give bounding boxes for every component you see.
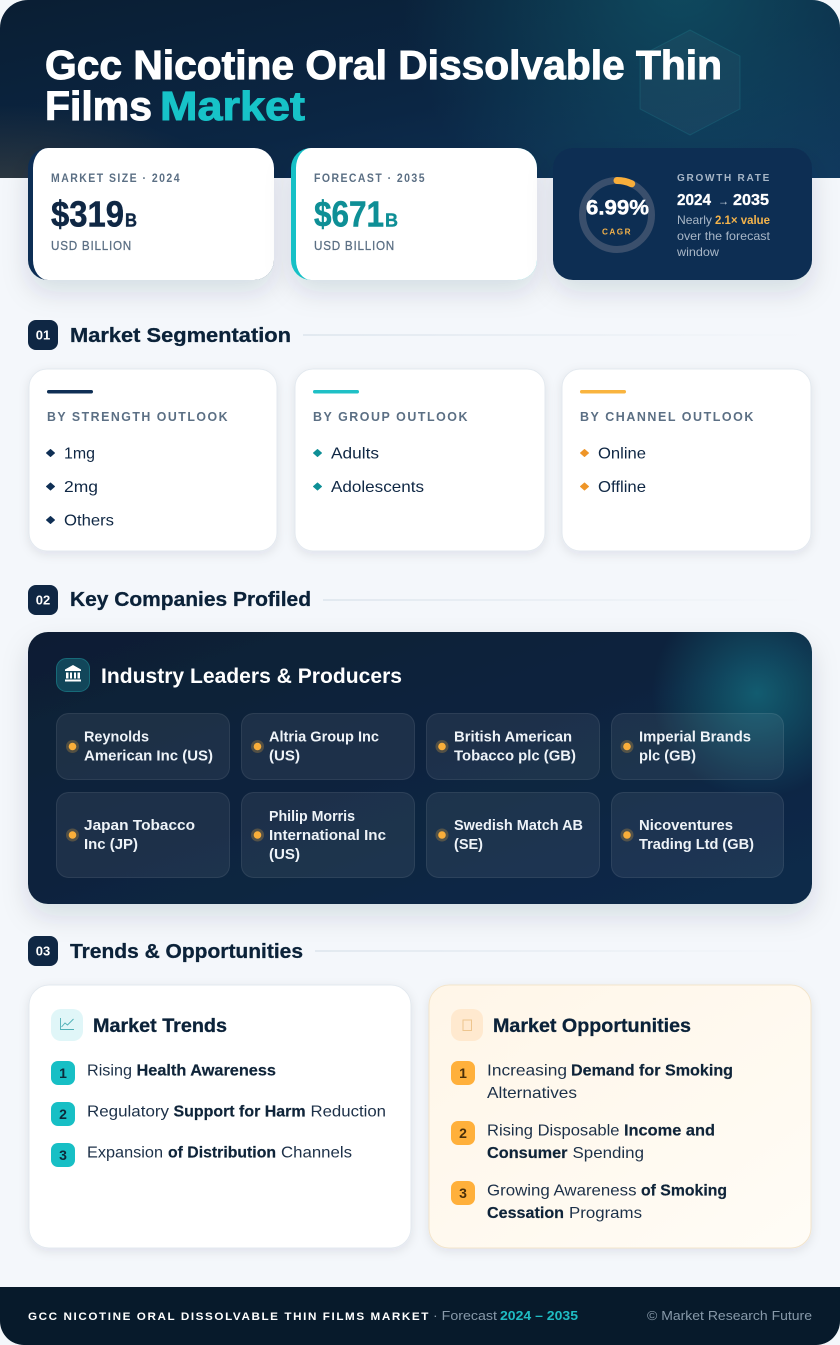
stat label: FORECAST · 2035 (314, 173, 426, 185)
segment list: Others (64, 512, 114, 530)
opportunity 3 (451, 1181, 727, 1222)
section heading 03: Trends & Opportunities (70, 940, 303, 963)
growth rate text: 2035 (733, 192, 769, 209)
stat unit: USD BILLION (51, 239, 132, 253)
company: Japan Tobacco: Inc (JP) (84, 836, 138, 853)
footer credit: © Market Research Future (647, 1309, 812, 1323)
section heading 01: 01 (36, 328, 50, 342)
trend 1: 1 (59, 1065, 67, 1081)
company: British American Tobacco: Tobacco plc (GB) (454, 748, 576, 764)
company: Swedish Match (426, 792, 600, 878)
chart: CAGR ring (582, 180, 652, 250)
title: Films (45, 83, 152, 129)
company: Swedish Match: (SE) (454, 836, 483, 853)
company: Imperial Brands: Imperial Brands (639, 728, 751, 746)
trend 3: Channels (281, 1144, 352, 1162)
panel heading: Market Opportunities (493, 1015, 691, 1037)
opportunity 2: Spending (572, 1145, 644, 1162)
opportunity 1: Increasing (487, 1062, 567, 1080)
section heading 01: Market Segmentation (70, 324, 291, 347)
company: Philip Morris (242, 792, 414, 878)
panel: market opportunities (429, 985, 811, 1248)
trend 1 (51, 1061, 276, 1085)
company: British American Tobacco: British American (454, 728, 572, 746)
opportunity 3: Growing Awareness (487, 1182, 636, 1200)
company: Imperial Brands: plc (GB) (639, 748, 696, 764)
segment list: Adults (331, 446, 379, 462)
panel: industry leaders (28, 632, 812, 904)
company: Philip Morris: Philip Morris (269, 808, 355, 825)
company: Nicoventures: Nicoventures (639, 817, 733, 834)
company: Philip Morris: (US) (269, 846, 300, 863)
footer title: 2024 – 2035 (500, 1309, 578, 1323)
segment list (46, 446, 114, 530)
company: Japan Tobacco: Japan Tobacco (84, 817, 195, 834)
opportunity 3: of Smoking (641, 1182, 727, 1200)
opportunity 1: Demand for Smoking (571, 1062, 733, 1080)
footer title (28, 1309, 578, 1323)
icon: institution (56, 658, 90, 692)
panel: by group outlook (295, 369, 545, 551)
segment heading: BY STRENGTH OUTLOOK (47, 409, 229, 424)
growth rate text: → (718, 194, 729, 208)
stat value: $319 (51, 194, 124, 234)
panel: market trends (29, 985, 411, 1248)
segment list: Online (598, 446, 646, 462)
stat value: B (385, 210, 398, 230)
stat value: B (125, 210, 137, 230)
segment list: Offline (598, 479, 646, 496)
icon: decorative hexagon (640, 30, 740, 135)
company: Altria Group: Altria Group Inc (269, 728, 379, 746)
chart: CAGR ring: 6.99% (586, 196, 649, 220)
opportunity 2: 2 (459, 1125, 467, 1141)
trend 1: Rising (87, 1062, 132, 1080)
trend 2: 2 (59, 1106, 67, 1122)
segment heading: BY CHANNEL OUTLOOK (580, 409, 755, 424)
trend 3: 3 (59, 1147, 67, 1163)
growth rate text (676, 172, 771, 259)
trend 2: Regulatory (87, 1104, 169, 1120)
section heading 01 (28, 320, 812, 350)
growth rate text: 2024 (677, 192, 711, 209)
trend 3: Expansion (87, 1144, 163, 1162)
opportunity 2: Income and (624, 1122, 715, 1140)
opportunity 3: Cessation (487, 1205, 564, 1222)
segment list: 1mg (64, 446, 95, 462)
segment list (580, 446, 646, 496)
company: British American Tobacco (426, 714, 600, 780)
company: Imperial Brands (612, 714, 784, 780)
opportunity 2 (451, 1121, 715, 1162)
company: Reynolds American: Reynolds (84, 728, 149, 746)
opportunity 2: Consumer (487, 1145, 568, 1162)
opportunity 3: Programs (569, 1205, 642, 1222)
trend 3 (51, 1143, 352, 1167)
panel heading: Industry Leaders & Producers (101, 664, 402, 688)
company: Altria Group: (US) (269, 748, 300, 764)
opportunity 1: Alternatives (487, 1085, 577, 1102)
segment heading: BY GROUP OUTLOOK (313, 409, 469, 424)
stat card: forecast 2035 (291, 148, 537, 280)
company: Nicoventures (612, 792, 784, 878)
company: Altria Group (242, 714, 414, 780)
icon: line chart (51, 1009, 83, 1041)
growth rate text: Nearly (677, 213, 712, 227)
company: Philip Morris: International Inc (269, 827, 386, 844)
company: Swedish Match: Swedish Match AB (454, 817, 583, 834)
opportunity 1: 1 (459, 1065, 467, 1081)
opportunity 3: 3 (459, 1185, 467, 1201)
company: Reynolds American (56, 714, 230, 780)
trend 2: Support for Harm (174, 1104, 306, 1120)
segment list: 2mg (64, 479, 98, 496)
growth rate text: window (676, 245, 719, 259)
panel: by strength outlook (29, 369, 277, 551)
growth rate text: GROWTH RATE (677, 172, 771, 184)
panel: by channel outlook (562, 369, 811, 551)
company: Nicoventures: Trading Ltd (GB) (639, 836, 754, 853)
growth rate text: 2.1× value (715, 213, 770, 227)
title: Market (160, 83, 305, 129)
segment list: Adolescents (331, 479, 424, 496)
segment list (314, 446, 424, 496)
trend 1: Health Awareness (136, 1062, 276, 1080)
trend 2: Reduction (310, 1104, 386, 1120)
growth rate text: over the forecast (677, 229, 771, 243)
stat unit: USD BILLION (314, 239, 395, 253)
trend 2 (51, 1102, 386, 1126)
section heading 02: Key Companies Profiled (70, 588, 311, 611)
chart: CAGR ring: CAGR (602, 226, 632, 236)
stat card: growth rate (553, 148, 812, 280)
trend 3: of Distribution (168, 1144, 276, 1162)
header banner (0, 0, 840, 178)
stat label: MARKET SIZE · 2024 (51, 173, 181, 185)
section heading 02: 02 (36, 592, 50, 608)
company: Japan Tobacco (56, 792, 230, 878)
title (45, 42, 722, 129)
section heading 03 (28, 936, 812, 966)
section heading 03: 03 (36, 944, 50, 958)
icon: placeholder glyph (451, 1009, 483, 1041)
company: Reynolds American: American Inc (US) (84, 748, 213, 764)
panel heading: Market Trends (93, 1015, 227, 1037)
opportunity 2: Rising Disposable (487, 1122, 620, 1140)
section heading 02 (28, 585, 812, 615)
footer title: GCC NICOTINE ORAL DISSOLVABLE THIN FILMS MARKET (28, 1311, 430, 1323)
stat card: market size 2024 (28, 148, 274, 280)
footer (0, 1287, 840, 1345)
stat value: $671 (314, 194, 384, 234)
opportunity 1 (451, 1061, 733, 1102)
title: Gcc Nicotine Oral Dissolvable Thin (45, 42, 722, 88)
footer title: · Forecast (433, 1309, 498, 1323)
